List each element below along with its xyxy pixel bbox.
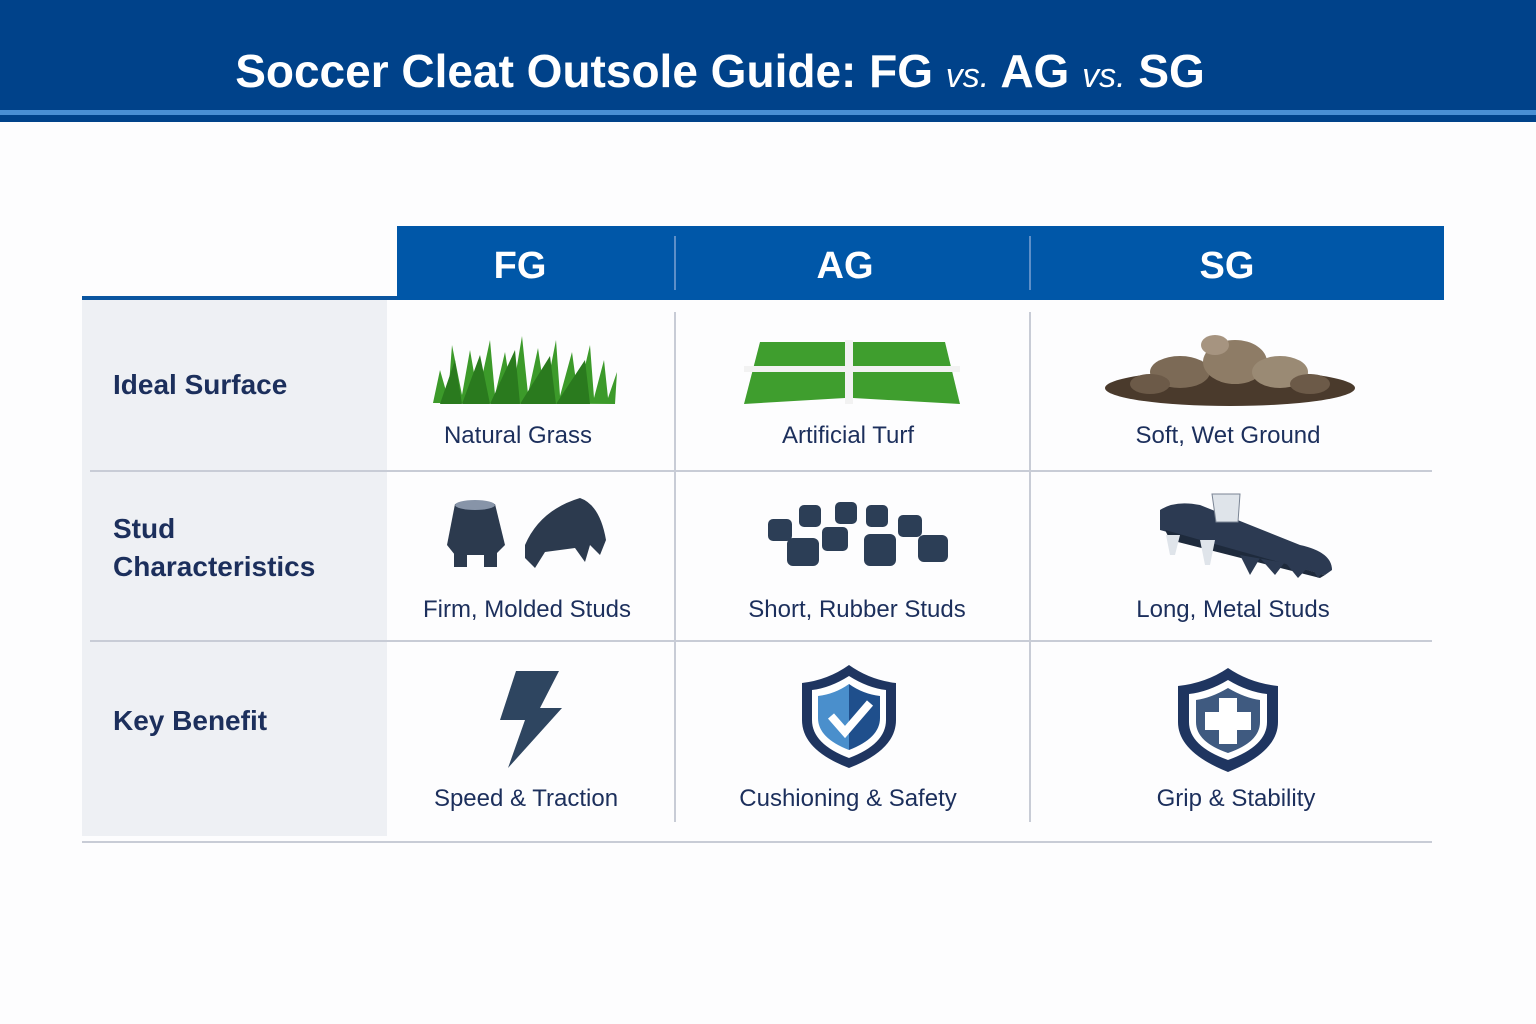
captions: Short, Rubber Studs <box>748 596 966 623</box>
column header bar: AG <box>816 245 874 287</box>
icon: metal studs boot <box>1160 494 1332 578</box>
column header bar <box>397 226 1444 300</box>
column header bar: FG <box>494 245 546 287</box>
row labels: Key Benefit <box>113 705 267 736</box>
icon: shield cross <box>1178 668 1278 772</box>
icon: molded studs <box>447 498 606 568</box>
row labels: Characteristics <box>113 551 315 582</box>
icon: shield check <box>802 665 896 768</box>
icon: rubber studs <box>768 502 948 566</box>
icon: turf <box>744 340 960 404</box>
header banner <box>0 0 1536 122</box>
row labels: Ideal Surface <box>113 369 287 400</box>
captions: Long, Metal Studs <box>1136 596 1330 623</box>
captions: Soft, Wet Ground <box>1136 422 1320 449</box>
captions <box>423 422 1330 812</box>
captions: Firm, Molded Studs <box>423 596 631 623</box>
row labels: Stud <box>113 513 175 544</box>
icon: dirt <box>1105 335 1355 406</box>
icon: lightning <box>500 671 562 768</box>
captions: Natural Grass <box>444 422 592 449</box>
captions: Grip & Stability <box>1157 785 1315 812</box>
captions: Speed & Traction <box>434 785 618 812</box>
row labels <box>113 369 315 736</box>
column header bar: SG <box>1200 245 1254 287</box>
captions: Cushioning & Safety <box>739 785 957 812</box>
table <box>82 226 1444 842</box>
icon: grass <box>433 336 617 404</box>
title: Soccer Cleat Outsole Guide: FG vs. AG vs. SG <box>235 45 1205 97</box>
captions: Artificial Turf <box>782 422 914 449</box>
